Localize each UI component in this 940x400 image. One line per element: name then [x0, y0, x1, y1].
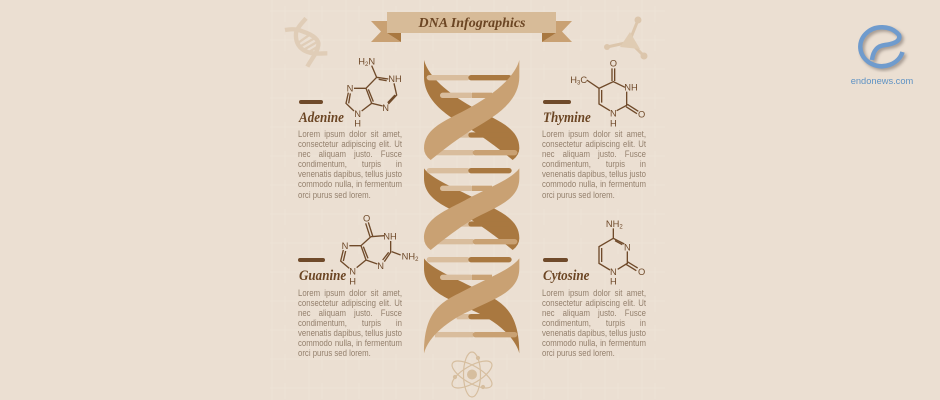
base pair bars [427, 75, 517, 337]
molecule: guanine: N [377, 261, 384, 271]
molecule: thymine: O [638, 109, 645, 119]
text block: consectetur adipiscing elit. Ut [542, 139, 646, 150]
molecule: adenine: N [354, 109, 361, 119]
title: DNA Infographics [418, 16, 526, 31]
dash [543, 258, 568, 262]
molecule: thymine: 3 [577, 81, 581, 87]
text block [542, 288, 646, 359]
text block: consectetur adipiscing elit. Ut [298, 139, 402, 150]
logo: endonews [851, 27, 914, 86]
text block: condimentum, turpis in [542, 318, 646, 329]
molecule: guanine [341, 214, 419, 286]
panel: thymine [542, 100, 646, 201]
text block: commodo nulla, in fermentum [298, 338, 402, 349]
text block: Lorem ipsum dolor sit amet, [298, 129, 402, 140]
molecule: adenine: N [347, 83, 353, 93]
text block: condimentum, turpis in [298, 159, 402, 170]
heading: Adenine [299, 110, 344, 126]
molecule: cytosine: N [624, 243, 631, 253]
text block: Lorem ipsum dolor sit amet, [542, 129, 646, 140]
molecule: thymine: H [570, 75, 577, 85]
molecule: adenine: N [368, 56, 375, 66]
molecule: thymine: N [610, 109, 617, 119]
molecule: cytosine: 2 [619, 225, 623, 231]
dash [298, 258, 325, 262]
text block: venenatis dapibus, tellus justo [298, 328, 402, 339]
molecule: guanine: 2 [415, 257, 419, 263]
text block: nec aliquam justo. Fusce [542, 149, 646, 160]
logo text: endonews.com [851, 76, 914, 86]
dash [299, 100, 323, 104]
text block: orci purus sed lorem. [298, 348, 371, 359]
text block [298, 288, 402, 359]
text block: condimentum, turpis in [542, 159, 646, 170]
molecule: thymine: O [610, 59, 617, 69]
molecule: adenine: 2 [365, 62, 369, 68]
text block: orci purus sed lorem. [542, 190, 615, 201]
dash [543, 100, 571, 104]
molecule: guanine: N [349, 266, 356, 276]
molecule: guanine: H [349, 276, 356, 286]
text block: consectetur adipiscing elit. Ut [542, 298, 646, 309]
front strand [424, 60, 519, 353]
text block: commodo nulla, in fermentum [542, 179, 646, 190]
molecule: guanine: N [342, 241, 348, 251]
icon: DNA strand [285, 18, 327, 67]
text block: venenatis dapibus, tellus justo [298, 169, 402, 180]
text block: nec aliquam justo. Fusce [298, 308, 402, 319]
icon: molecule [604, 16, 648, 60]
text block: commodo nulla, in fermentum [298, 179, 402, 190]
back strand [424, 60, 519, 353]
text block: consectetur adipiscing elit. Ut [298, 298, 402, 309]
text block: nec aliquam justo. Fusce [542, 308, 646, 319]
text block: orci purus sed lorem. [298, 190, 371, 201]
text block [298, 129, 402, 201]
molecule: thymine: H [610, 119, 617, 129]
heading: Thymine [543, 110, 591, 126]
molecule: cytosine: O [638, 267, 645, 277]
panel: guanine [298, 258, 402, 359]
molecule: guanine: O [363, 214, 370, 224]
text block: commodo nulla, in fermentum [542, 338, 646, 349]
molecule: cytosine: H [610, 276, 617, 286]
molecule: adenine: H [354, 119, 361, 129]
molecule: guanine: NH [383, 232, 397, 242]
text block: Lorem ipsum dolor sit amet, [542, 288, 646, 298]
molecule: guanine: NH [402, 251, 415, 261]
text block: venenatis dapibus, tellus justo [542, 169, 646, 180]
molecule: thymine: C [580, 75, 587, 85]
icon: atom [448, 352, 496, 397]
molecule: adenine: N [382, 103, 389, 113]
text block: orci purus sed lorem. [542, 348, 615, 359]
text block: venenatis dapibus, tellus justo [542, 328, 646, 339]
molecule: cytosine: NH [606, 219, 619, 229]
molecule: cytosine [599, 219, 645, 286]
heading: Guanine [299, 268, 346, 284]
molecule: thymine: NH [624, 83, 638, 93]
DNA double helix [424, 60, 519, 353]
text block: condimentum, turpis in [298, 318, 402, 329]
panel: cytosine [542, 258, 646, 359]
text block: nec aliquam justo. Fusce [298, 149, 402, 160]
molecule: thymine [570, 59, 645, 129]
heading: Cytosine [543, 268, 589, 284]
text block: Lorem ipsum dolor sit amet, [298, 288, 402, 298]
panel: adenine [298, 100, 402, 201]
molecule: adenine: H [358, 56, 365, 66]
molecule: adenine [346, 56, 402, 129]
text block [542, 129, 646, 201]
molecule: cytosine: N [610, 267, 617, 277]
title banner [371, 12, 572, 42]
molecule: adenine: NH [388, 74, 402, 84]
